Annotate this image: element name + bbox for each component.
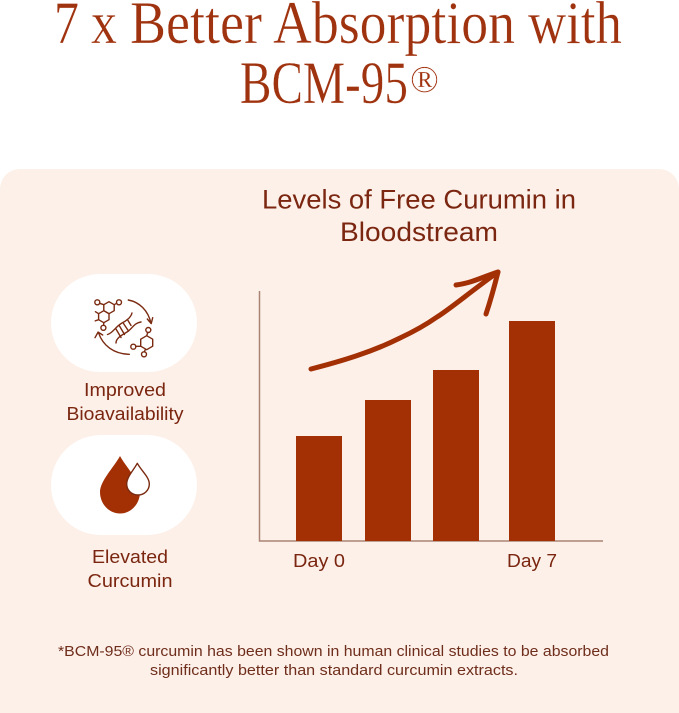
- label: elevated curcumin: Elevated: [92, 546, 168, 567]
- title: BCM-95: [240, 50, 408, 116]
- footnote: *BCM-95® curcumin has been shown in human clinical studies to be absorbed: [58, 644, 609, 660]
- label: elevated curcumin: Curcumin: [88, 570, 172, 591]
- label: day 7: Day 7: [507, 550, 557, 571]
- axes: [260, 291, 603, 541]
- footnote: [58, 644, 609, 679]
- icon: molecules and DNA: [51, 274, 197, 372]
- benefit: improved bioavailability: [51, 274, 197, 424]
- title: ®: [410, 59, 439, 101]
- panel: chart background: [0, 169, 679, 713]
- label: elevated curcumin: [88, 546, 172, 591]
- bar chart: [260, 291, 603, 571]
- bar: second: [365, 400, 411, 541]
- benefit: elevated curcumin: [51, 435, 197, 591]
- bar: third: [433, 370, 479, 541]
- chart title: [262, 184, 576, 247]
- icon: blood drops: [51, 435, 197, 535]
- bar: day 7: [509, 321, 555, 541]
- label: day 0: Day 0: [293, 550, 345, 571]
- footnote: significantly better than standard curcumin extracts.: [150, 663, 518, 679]
- chart title: Bloodstream: [340, 217, 498, 247]
- bar: day 0: [296, 436, 342, 541]
- title: [54, 0, 622, 116]
- label: improved bioavailability: Bioavailability: [66, 403, 184, 424]
- arrow: upward trend: [311, 272, 498, 369]
- label: improved bioavailability: Improved: [84, 379, 166, 400]
- chart title: Levels of Free Curumin in: [262, 184, 576, 214]
- label: improved bioavailability: [66, 379, 184, 424]
